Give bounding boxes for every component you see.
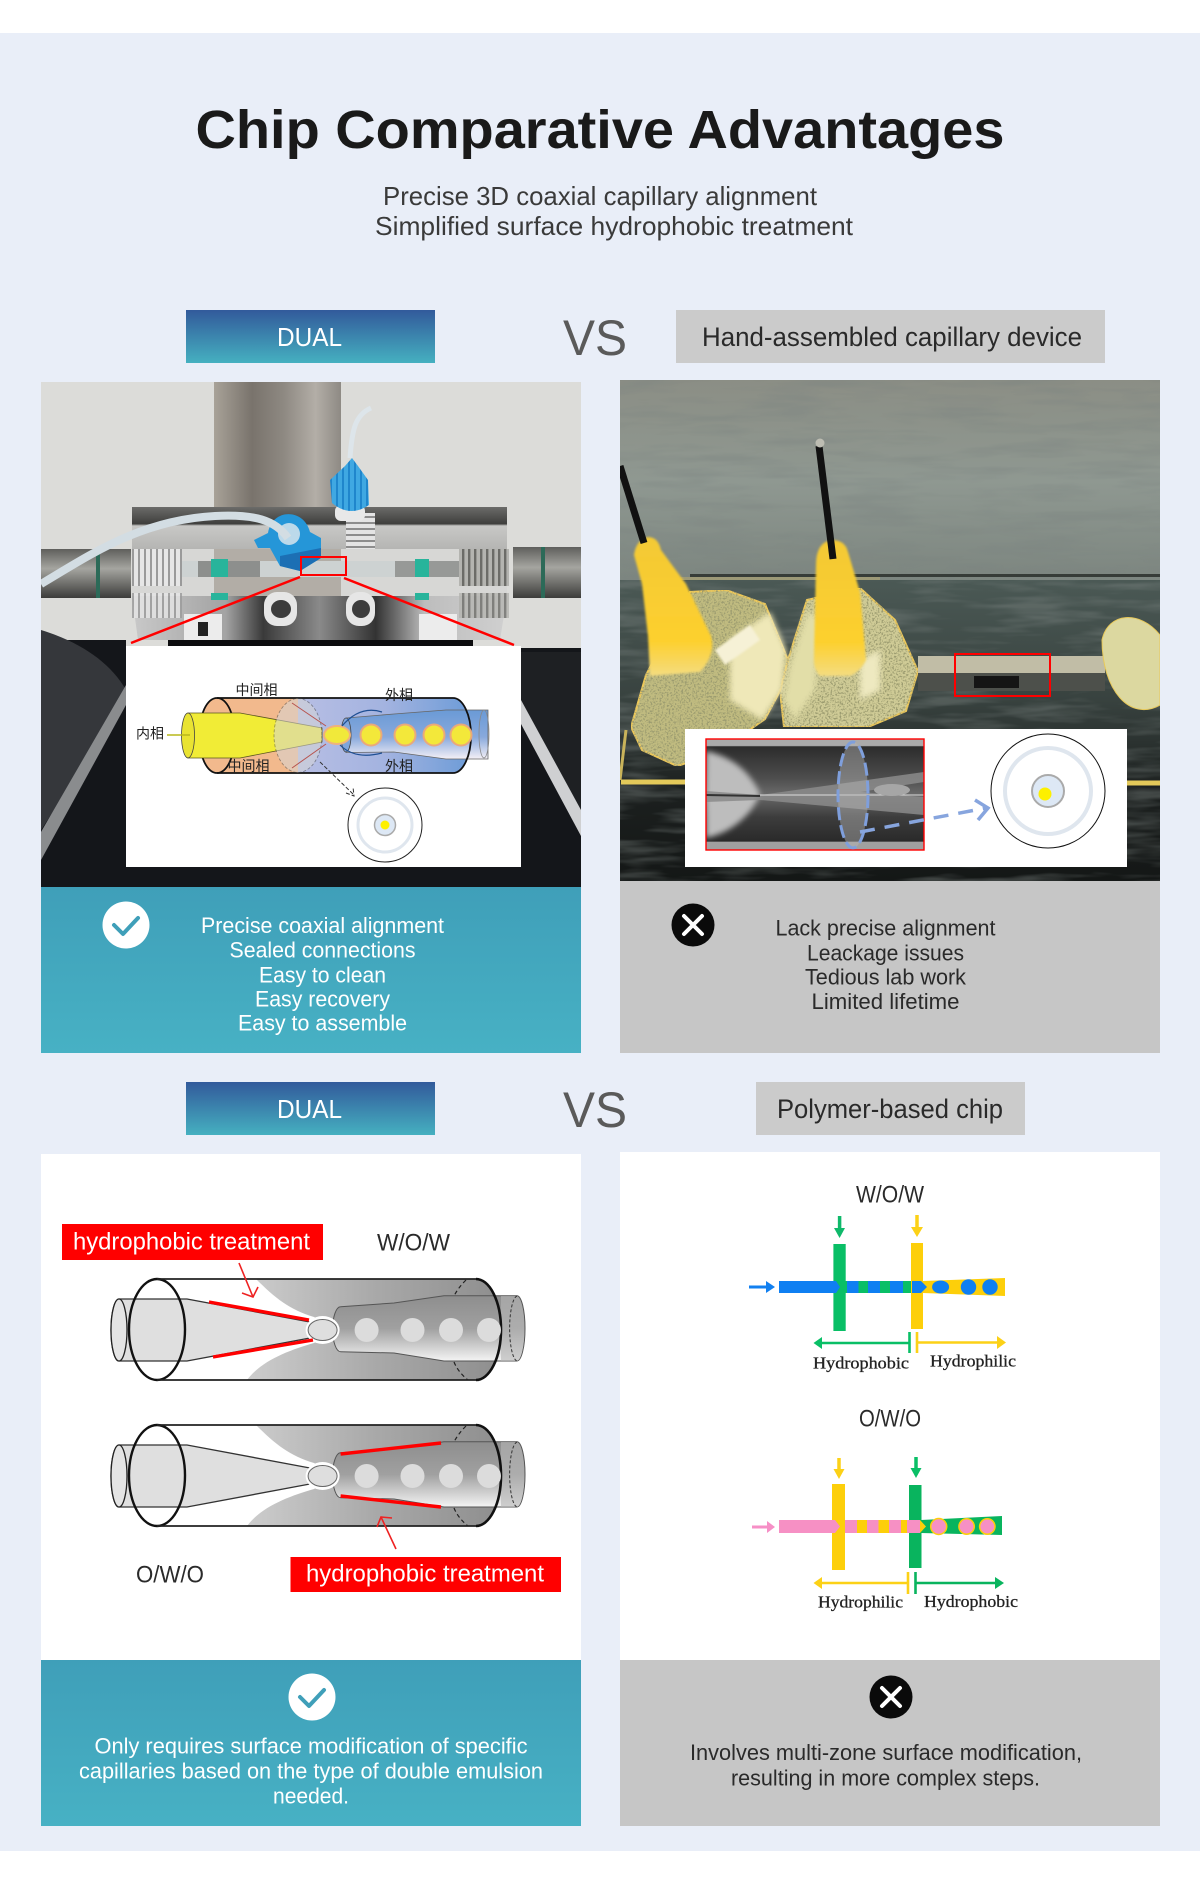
panel: polymer chip drawback note: [620, 1660, 1160, 1826]
inset: capillary micrograph and cross-section: [685, 729, 1127, 867]
zoom marker: red rectangle and lines on DUAL photo: [131, 557, 514, 645]
badge: DUAL row 2: DUAL: [277, 1094, 342, 1124]
panel: hand-assembled drawbacks: Leackage issues: [807, 940, 964, 966]
label: W/O/W: W/O/W: [377, 1230, 450, 1256]
badge: polymer-based chip: [756, 1082, 1025, 1135]
panel: hand-assembled drawbacks: Lack precise alignment: [776, 916, 996, 940]
panel: hand-assembled drawbacks: Tedious lab work: [805, 964, 967, 990]
panel: DUAL hydrophobic treatment diagram: [41, 1154, 581, 1660]
diagram: O/W/O flow: [752, 1457, 1018, 1612]
label: O/W/O: O/W/O: [859, 1406, 921, 1432]
inset: DUAL coaxial flow diagram: 中间相: [236, 682, 278, 698]
label: hydrophobic treatment top: [62, 1224, 323, 1260]
badge: DUAL row 1: DUAL: [277, 322, 342, 352]
subtitle: [375, 181, 854, 241]
diagram: W/O/W device: [111, 1263, 525, 1380]
diagram: W/O/W flow: [749, 1215, 1016, 1372]
label: W/O/W: W/O/W: [856, 1182, 924, 1208]
panel: DUAL surface modification note: [41, 1660, 581, 1826]
panel: DUAL advantages: Easy recovery: [255, 986, 390, 1012]
panel: DUAL surface modification note: Only requires surface modification of specific: [94, 1734, 528, 1758]
panel: polymer chip diagram: [620, 1152, 1160, 1660]
diagram: O/W/O device: [111, 1425, 525, 1549]
label: hydrophobic treatment top: hydrophobic treatment: [73, 1228, 310, 1256]
title: Chip Comparative Advantages: [196, 100, 1004, 160]
panel: DUAL advantages: Precise coaxial alignment: [201, 913, 444, 938]
diagram: W/O/W flow: Hydrophilic: [930, 1352, 1016, 1370]
VS label row 1: VS: [563, 310, 627, 366]
panel: DUAL chip photo: [41, 382, 581, 887]
panel: hand-assembled device photo: [620, 380, 1160, 881]
badge: DUAL row 2: [186, 1082, 435, 1135]
VS label row 2: VS: [563, 1082, 627, 1138]
badge: hand-assembled capillary device: Hand-assembled capillary device: [702, 322, 1082, 352]
panel: polymer chip drawback note: Involves multi-zone surface modification,: [690, 1740, 1082, 1765]
panel: DUAL advantages: [41, 887, 581, 1053]
diagram: W/O/W flow: Hydrophobic: [813, 1354, 909, 1372]
badge: hand-assembled capillary device: [676, 310, 1105, 363]
panel: DUAL surface modification note: needed.: [273, 1784, 349, 1808]
label: O/W/O: O/W/O: [136, 1562, 204, 1588]
icon: check: [288, 1674, 336, 1720]
inset: DUAL coaxial flow diagram: 外相: [385, 687, 413, 703]
inset: DUAL coaxial flow diagram: 内相: [136, 726, 164, 742]
panel: DUAL surface modification note: capillaries based on the type of double emulsion: [79, 1758, 543, 1784]
diagram: O/W/O flow: Hydrophilic: [818, 1592, 903, 1612]
label: hydrophobic treatment bottom: hydrophobic treatment: [306, 1560, 544, 1588]
panel: hand-assembled drawbacks: [620, 881, 1160, 1053]
subtitle: Precise 3D coaxial capillary alignment: [383, 181, 818, 211]
diagram: O/W/O flow: Hydrophobic: [924, 1592, 1018, 1611]
panel: polymer chip drawback note: resulting in more complex steps.: [731, 1766, 1040, 1790]
subtitle: Simplified surface hydrophobic treatment: [375, 211, 854, 241]
badge: polymer-based chip: Polymer-based chip: [777, 1094, 1003, 1124]
panel: DUAL advantages: Easy to assemble: [238, 1010, 407, 1036]
inset: DUAL coaxial flow diagram: [126, 646, 521, 867]
inset: DUAL coaxial flow diagram: 外相: [385, 758, 413, 774]
label: hydrophobic treatment bottom: [290, 1557, 561, 1592]
icon: cross: [672, 904, 714, 946]
icon: check: [102, 902, 150, 948]
inset: DUAL coaxial flow diagram: 中间相: [228, 758, 270, 774]
badge: DUAL row 1: [186, 310, 435, 363]
panel: DUAL advantages: Easy to clean: [259, 962, 386, 988]
panel: DUAL advantages: Sealed connections: [230, 938, 416, 962]
red zoom marker on capillary: [955, 654, 1050, 696]
panel: hand-assembled drawbacks: Limited lifetime: [812, 989, 960, 1014]
icon: cross: [870, 1676, 912, 1718]
